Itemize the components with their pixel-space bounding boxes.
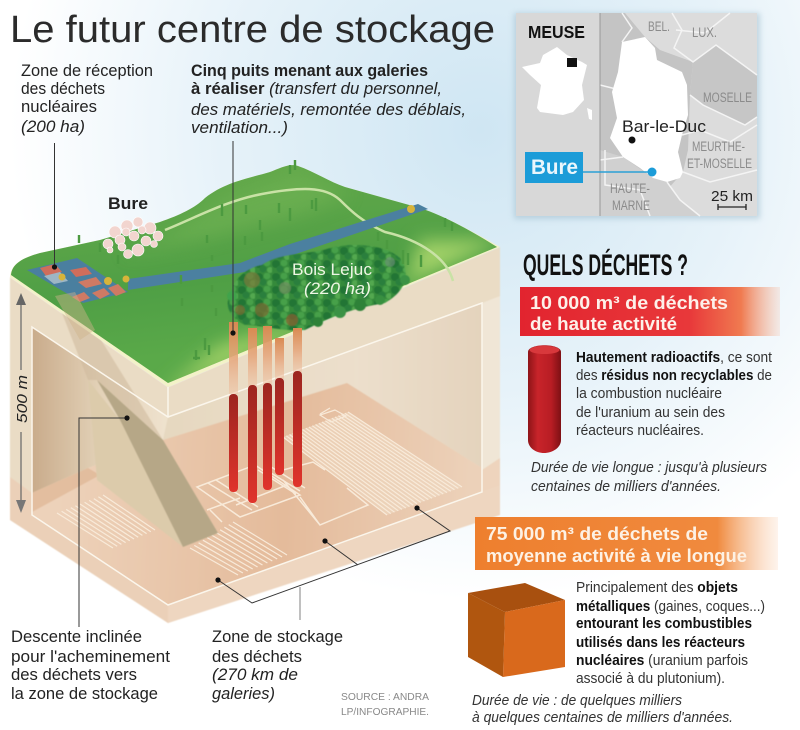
label: storage zone: des déchets (212, 648, 302, 666)
text: description: de l'uranium au sein des (576, 404, 725, 421)
panel: intermediate activity waste (468, 517, 778, 726)
heading: quels dechets: QUELS DÉCHETS ? (523, 248, 688, 282)
village of Bure (103, 217, 163, 258)
text: description: Principalement des objets (576, 579, 738, 596)
500 m depth arrow: 500 m (14, 375, 31, 423)
text: lifetime: centaines de milliers d'années. (531, 478, 721, 495)
neighbouring labels: LUX. (692, 25, 717, 40)
scattered trees (79, 160, 452, 360)
source: LP/INFOGRAPHIE. (341, 706, 429, 718)
scale: 25 km (711, 188, 753, 205)
reception zone buildings (27, 205, 415, 303)
3D block cutaway of the site (10, 141, 505, 627)
surface labels: Bois Lejuc (292, 261, 372, 279)
text: description: associé à du plutonium). (576, 670, 725, 687)
neighbouring labels: BEL. (648, 19, 670, 34)
panel: high activity waste (520, 287, 780, 495)
departments (600, 13, 757, 216)
ramp trace on surface (55, 292, 95, 340)
text: lifetime (472, 692, 733, 726)
text: lifetime: Durée de vie longue : jusqu'à plusieurs (531, 459, 767, 476)
green surface (10, 165, 505, 395)
text: description: la combustion nucléaire (576, 385, 722, 402)
label: reception zone: (200 ha) (21, 118, 85, 136)
label: five shafts: à réaliser (transfert du personnel, (191, 80, 442, 98)
red banner: 10 000 m³ de déchets (530, 293, 728, 313)
label: five shafts: des matériels, remontée des déblais, (191, 101, 466, 119)
label: storage zone (212, 628, 343, 703)
text: description: entourant les combustibles (576, 615, 752, 632)
label: inclined descent: la zone de stockage (11, 685, 158, 703)
500 m depth arrow (14, 293, 31, 513)
surface labels: (220 ha) (304, 280, 371, 298)
storage galleries (57, 408, 462, 575)
access road (128, 204, 428, 290)
block body (10, 247, 500, 623)
forest: Bois Lejuc (227, 245, 410, 330)
label: reception zone (21, 62, 153, 136)
label: inclined descent: pour l'acheminement (11, 648, 170, 666)
white track (165, 189, 453, 281)
Bure marker: Bure (531, 156, 578, 179)
surface labels: Bure (108, 194, 148, 213)
text: description: métalliques (gaines, coques...) (576, 598, 765, 615)
label: five shafts: ventilation...) (191, 119, 288, 137)
text: description: Hautement radioactifs, ce sont (576, 349, 773, 366)
Bure marker (525, 152, 656, 183)
label: storage zone: Zone de stockage (212, 628, 343, 646)
label: inclined descent: Descente inclinée (11, 628, 142, 646)
inclined descent ramp (55, 293, 218, 547)
label: inclined descent: des déchets vers (11, 666, 137, 684)
text: description (576, 579, 765, 687)
text: lifetime: Durée de vie : de quelques milliers (472, 692, 682, 709)
text: description: réacteurs nucléaires. (576, 422, 704, 439)
inset: France (516, 13, 600, 216)
label: storage zone: galeries) (212, 685, 275, 703)
text: description: utilisés dans les réacteurs (576, 634, 745, 651)
text: description (576, 349, 773, 439)
orange banner: moyenne activité à vie longue (486, 546, 747, 566)
neighbouring labels: ET-MOSELLE (687, 156, 752, 171)
orange banner (475, 517, 778, 570)
neighbouring labels: MARNE (612, 198, 650, 213)
neighbouring labels (610, 19, 752, 213)
neighbouring labels: MEURTHE- (692, 139, 745, 154)
label: inclined descent (11, 628, 170, 703)
inset: France: MEUSE (528, 22, 585, 42)
icon: red cylinder (528, 345, 561, 453)
label: storage zone: (270 km de (212, 666, 298, 684)
text: description: nucléaires (uranium parfois (576, 652, 748, 669)
orange banner: 75 000 m³ de déchets de (486, 524, 708, 544)
icon: orange cube (468, 583, 565, 677)
text: lifetime (531, 459, 767, 495)
Bar-le-Duc (622, 117, 707, 144)
red banner: de haute activité (530, 314, 677, 334)
label: five shafts (191, 62, 466, 137)
surface labels (108, 194, 372, 298)
text: description: des résidus non recyclables de (576, 367, 772, 384)
panel: location map (514, 13, 760, 219)
underground cavity (32, 303, 482, 605)
Meuse department (610, 37, 688, 182)
label: reception zone: Zone de réception (21, 62, 153, 80)
label: reception zone: nucléaires (21, 98, 97, 116)
Bar-le-Duc: Bar-le-Duc (622, 117, 707, 136)
title: Le futur centre de stockage (10, 9, 495, 51)
text: lifetime: à quelques centaines de milliers d'années. (472, 709, 733, 726)
label: reception zone: des déchets (21, 80, 105, 98)
slab front edge (167, 387, 169, 417)
label: five shafts: Cinq puits menant aux galeries (191, 62, 428, 80)
source (341, 691, 429, 718)
leader lines (52, 141, 450, 627)
frame lines (32, 303, 482, 605)
five shafts (229, 322, 302, 503)
red banner (520, 287, 780, 336)
neighbouring labels: HAUTE- (610, 181, 650, 196)
source: SOURCE : ANDRA (341, 691, 429, 703)
neighbouring labels: MOSELLE (703, 90, 752, 105)
